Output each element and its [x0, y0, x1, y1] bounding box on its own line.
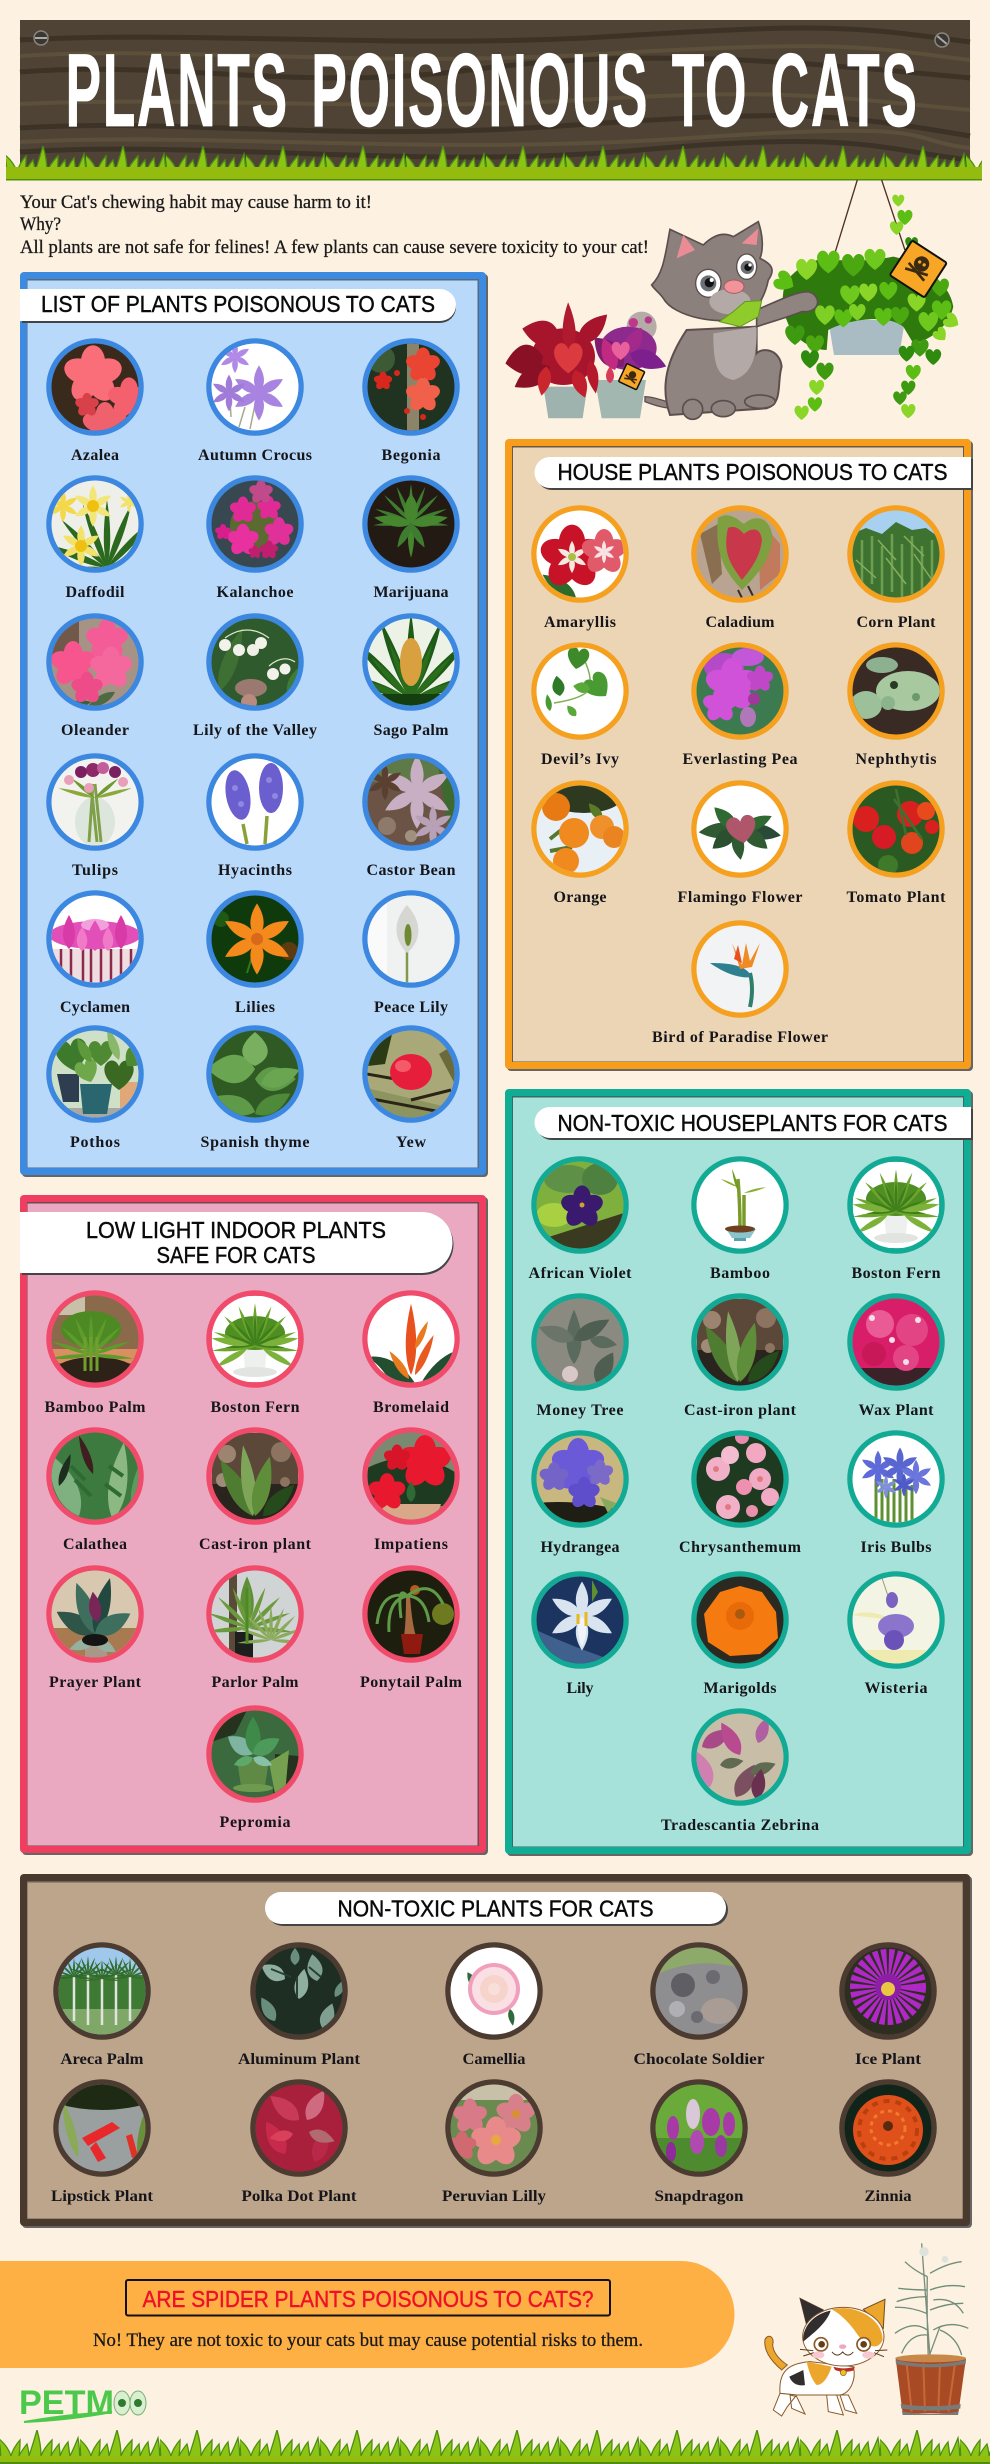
plant: Autumn Crocus — [198, 341, 312, 464]
plant: Peace Lily — [365, 893, 457, 1016]
plant: Areca Palm: Areca Palm — [60, 2051, 144, 2068]
plant: Ponytail Palm: Ponytail Palm — [360, 1674, 463, 1691]
plant: Boston Fern: Boston Fern — [852, 1265, 941, 1282]
illustration: hanging pothos with poison sign — [771, 180, 962, 420]
panel frame: teal — [505, 1089, 973, 1856]
plant: Flamingo Flower: Flamingo Flower — [678, 889, 802, 906]
panel: low light indoor plants safe for cats — [20, 1195, 488, 1855]
plant: Snapdragon: Snapdragon — [654, 2188, 744, 2205]
plant: Tulips: Tulips — [72, 862, 118, 879]
illustration: potted red plants — [503, 302, 669, 418]
plant: Lily of the Valley: Lily of the Valley — [193, 722, 317, 739]
heading — [20, 1212, 453, 1275]
plant: Chrysanthemum: Chrysanthemum — [679, 1539, 802, 1556]
icon: small poison sign — [618, 363, 645, 390]
plant: Ice Plant: Ice Plant — [855, 2051, 922, 2068]
plant: Bamboo Palm: Bamboo Palm — [44, 1399, 146, 1416]
callout heading box — [126, 2280, 610, 2316]
icon: left screw — [34, 31, 48, 45]
panel frame: blue — [20, 272, 488, 1177]
plant: Calathea: Calathea — [63, 1536, 127, 1553]
plant: Castor Bean — [365, 755, 457, 879]
plant: Tulips — [49, 756, 141, 879]
plant: Spanish thyme: Spanish thyme — [200, 1134, 310, 1151]
plant: Bromelaid: Bromelaid — [373, 1399, 449, 1416]
plant: Flamingo Flower — [678, 783, 802, 906]
plant: Marijuana — [365, 478, 457, 601]
plant: Pothos: Pothos — [70, 1134, 120, 1151]
plant: Oleander: Oleander — [61, 722, 129, 739]
grass strip under title — [6, 146, 982, 180]
plant: Kalanchoe — [209, 478, 301, 601]
plant: Cast-iron plant — [684, 1296, 797, 1419]
plant: Everlasting Pea: Everlasting Pea — [682, 751, 798, 768]
plant: Aluminum Plant — [238, 1945, 361, 2068]
plant: Begonia — [365, 341, 457, 464]
plant: Boston Fern: Boston Fern — [210, 1399, 300, 1416]
plant: Lilies: Lilies — [235, 999, 275, 1016]
title banner: wooden sign — [20, 20, 970, 170]
illustration: spider plant in wooden pot — [895, 2243, 968, 2415]
plant: Tomato Plant: Tomato Plant — [846, 889, 946, 906]
plant: Pothos — [49, 1027, 148, 1151]
plant: Wax Plant — [850, 1296, 942, 1419]
plant: Hydrangea: Hydrangea — [540, 1539, 620, 1556]
plant: Everlasting Pea — [682, 645, 798, 768]
plant: Areca Palm — [55, 1945, 149, 2068]
panel frame: orange — [505, 439, 973, 1071]
panel: house plants poisonous to cats — [505, 439, 973, 1071]
panel: list of plants poisonous to cats — [20, 272, 495, 1177]
plant: Pepromia — [209, 1708, 301, 1831]
grass strip at bottom — [0, 2430, 990, 2464]
plant: Cast-iron plant: Cast-iron plant — [684, 1402, 797, 1419]
plant: Zinnia: Zinnia — [864, 2188, 912, 2205]
plant: Lily of the Valley — [193, 616, 324, 739]
callout heading box: ARE SPIDER PLANTS POISONOUS TO CATS? — [142, 2286, 594, 2312]
plant: Devil's Ivy — [534, 645, 626, 768]
plant: Sago Palm — [362, 613, 460, 738]
heading — [265, 1892, 728, 1926]
plant: Aluminum Plant: Aluminum Plant — [238, 2051, 361, 2068]
plant: Bamboo: Bamboo — [710, 1265, 770, 1282]
plant: Chocolate Soldier — [634, 1945, 764, 2068]
callout: are spider plants poisonous — [0, 2261, 734, 2368]
plant: Amaryllis — [534, 508, 629, 631]
plant: Hyacinths: Hyacinths — [218, 862, 292, 879]
plant: Begonia: Begonia — [382, 447, 440, 464]
intro text: All plants are not safe for felines! A few plants can cause severe toxicity to your cat! — [20, 237, 649, 258]
icon: poison sign — [890, 240, 947, 298]
plant: Lipstick Plant: Lipstick Plant — [51, 2188, 154, 2205]
illustration: grey cat chewing leaf — [645, 222, 818, 419]
plant: Yew: Yew — [396, 1134, 426, 1151]
plant: Peruvian Lilly: Peruvian Lilly — [442, 2188, 546, 2205]
plant: Peruvian Lilly — [442, 2082, 546, 2205]
logo: Petmoo: PETM — [19, 2384, 114, 2422]
plant: Lilies — [209, 893, 301, 1016]
plant: Impatiens: Impatiens — [374, 1536, 448, 1553]
plant: Boston Fern — [850, 1159, 942, 1282]
plant: Wisteria: Wisteria — [864, 1680, 928, 1697]
plant: Devil's Ivy: Devil’s Ivy — [541, 751, 619, 768]
plant: Daffodil — [46, 475, 144, 597]
heading: SAFE FOR CATS — [156, 1242, 316, 1268]
intro text: Your Cat's chewing habit may cause harm to it! — [20, 192, 372, 213]
plant: Marijuana: Marijuana — [374, 584, 448, 601]
callout text: No! They are not toxic to your cats but may cause potential risks to them. — [93, 2330, 643, 2351]
heading: NON-TOXIC HOUSEPLANTS FOR CATS — [558, 1110, 948, 1136]
plant: Money Tree — [534, 1296, 626, 1419]
plant: Cast-iron plant — [199, 1430, 312, 1553]
illustration: calico cat — [765, 2298, 887, 2416]
plant: Nephthytis: Nephthytis — [856, 751, 936, 768]
plant: Tomato Plant — [846, 783, 946, 906]
plant: Chocolate Soldier: Chocolate Soldier — [634, 2051, 764, 2068]
plant: Snapdragon — [653, 2082, 745, 2205]
plant: Cyclamen: Cyclamen — [60, 999, 130, 1016]
plant: Cyclamen — [49, 893, 141, 1016]
icon: right screw — [935, 33, 949, 47]
panel frame: brown — [20, 1874, 972, 2228]
plant: Bird of Paradise Flower: Bird of Paradise Flower — [652, 1029, 828, 1046]
plant: Hydrangea — [534, 1433, 626, 1556]
plant: Peace Lily: Peace Lily — [374, 999, 448, 1016]
plant: Ice Plant — [842, 1945, 934, 2068]
plant: Impatiens — [365, 1430, 457, 1553]
plant: Castor Bean: Castor Bean — [366, 862, 456, 879]
plant: Iris Bulbs — [850, 1433, 942, 1556]
plant: Wisteria — [850, 1574, 942, 1697]
plant: Money Tree: Money Tree — [536, 1402, 624, 1419]
plant: Nephthytis — [850, 645, 942, 768]
plant: Prayer Plant — [49, 1568, 142, 1691]
heading: HOUSE PLANTS POISONOUS TO CATS — [558, 459, 948, 485]
plant: Camellia: Camellia — [462, 2051, 526, 2068]
plant: Sago Palm: Sago Palm — [374, 722, 449, 739]
plant: Caladium: Caladium — [706, 614, 775, 631]
plant: Ponytail Palm — [360, 1568, 463, 1691]
plant: Calathea — [40, 1430, 150, 1553]
plant: Lily — [534, 1574, 626, 1697]
plant: Cast-iron plant: Cast-iron plant — [199, 1536, 312, 1553]
plant: Tradescantia Zebrina — [661, 1711, 819, 1834]
plant: Orange: Orange — [554, 889, 606, 906]
plant: Daffodil: Daffodil — [66, 584, 125, 601]
plant: Tradescantia Zebrina: Tradescantia Zebrina — [661, 1817, 819, 1834]
panel: non-toxic plants for cats — [20, 1874, 972, 2228]
plant: Parlor Palm: Parlor Palm — [212, 1674, 299, 1691]
plant: Bird of Paradise Flower — [652, 923, 828, 1046]
plant: Bamboo Palm — [44, 1293, 146, 1416]
panel: non-toxic houseplants for cats — [505, 1089, 973, 1856]
plant: Yew — [365, 1028, 457, 1151]
intro text: Why? — [20, 214, 61, 235]
plant: African Violet — [528, 1159, 632, 1282]
plant: Spanish thyme — [200, 1028, 310, 1151]
plant: Boston Fern — [209, 1293, 301, 1416]
plant: African Violet: African Violet — [528, 1265, 632, 1282]
plant: Iris Bulbs: Iris Bulbs — [860, 1539, 932, 1556]
plant: Parlor Palm — [205, 1568, 305, 1691]
heading: LOW LIGHT INDOOR PLANTS — [86, 1217, 386, 1243]
plant: Lily: Lily — [566, 1680, 594, 1697]
intro text — [20, 192, 649, 258]
plant: Amaryllis: Amaryllis — [544, 614, 616, 631]
plant: Chrysanthemum — [679, 1430, 802, 1556]
plant: Prayer Plant: Prayer Plant — [49, 1674, 142, 1691]
heading: LIST OF PLANTS POISONOUS TO CATS — [41, 291, 435, 317]
plant: Kalanchoe: Kalanchoe — [216, 584, 294, 601]
panel frame: pink — [20, 1195, 488, 1855]
plant: Orange — [534, 777, 626, 906]
plant: Bamboo — [694, 1159, 786, 1282]
plant: Lipstick Plant — [51, 2082, 154, 2205]
plant: Oleander — [48, 616, 141, 739]
plant: Zinnia — [842, 2082, 934, 2205]
plant: Caladium — [694, 508, 786, 631]
plant: Bromelaid — [365, 1293, 457, 1416]
plant: Marigolds: Marigolds — [704, 1680, 776, 1697]
plant: Polka Dot Plant — [242, 2082, 357, 2205]
plant: Hyacinths — [209, 756, 301, 879]
plant: Azalea: Azalea — [71, 447, 119, 464]
plant: Azalea — [49, 341, 152, 464]
heading: NON-TOXIC PLANTS FOR CATS — [338, 1896, 654, 1922]
plant: Camellia — [448, 1945, 540, 2068]
plant: Marigolds — [694, 1574, 786, 1697]
plant: Corn Plant: Corn Plant — [856, 614, 936, 631]
plant: Wax Plant: Wax Plant — [858, 1402, 934, 1419]
plant: Autumn Crocus: Autumn Crocus — [198, 447, 312, 464]
plant: Corn Plant — [850, 508, 942, 631]
plant: Polka Dot Plant: Polka Dot Plant — [242, 2188, 357, 2205]
plant: Pepromia: Pepromia — [220, 1814, 290, 1831]
